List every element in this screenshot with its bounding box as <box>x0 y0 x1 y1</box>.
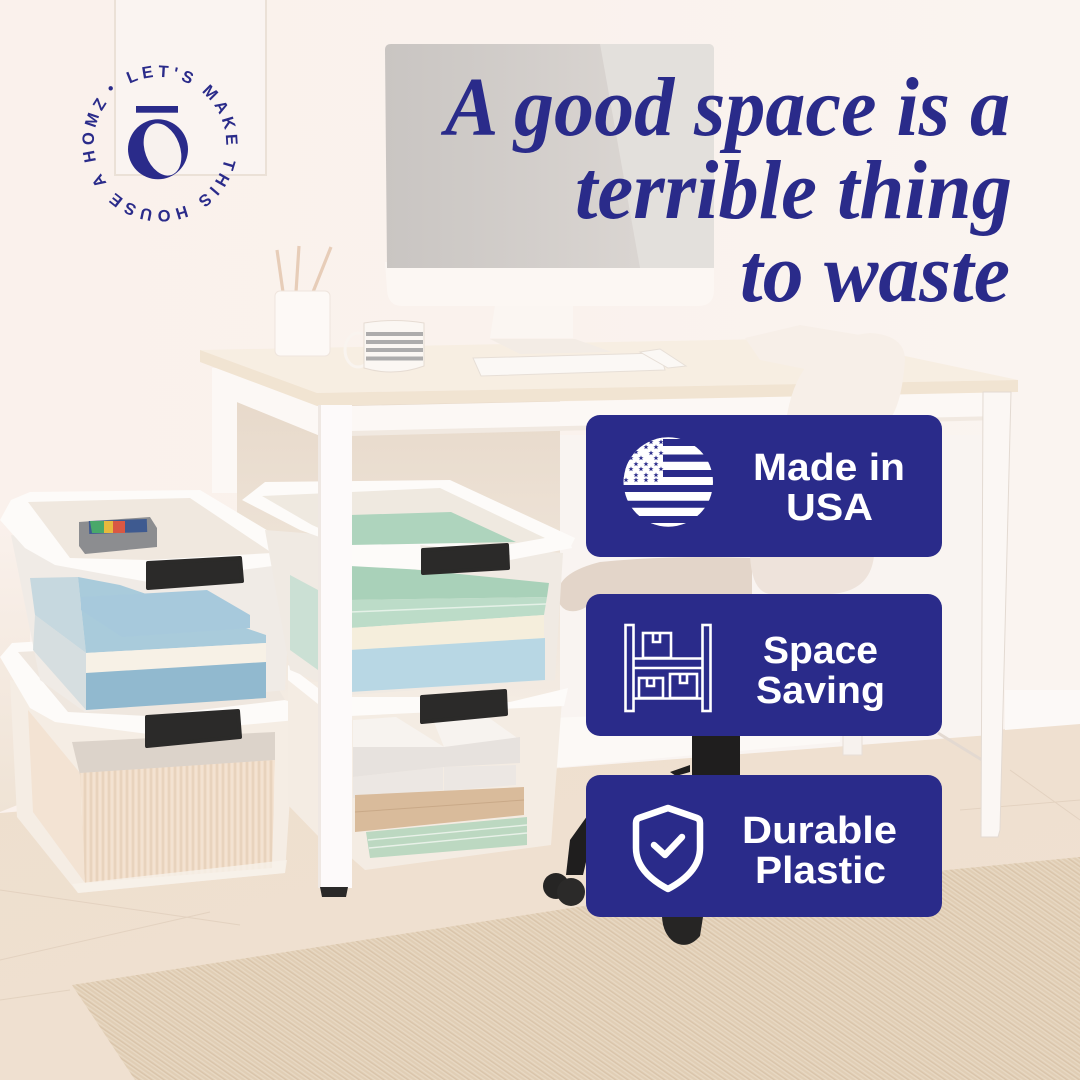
badge label <box>756 630 885 712</box>
keyboard and mouse <box>473 349 686 376</box>
badge label: Made in <box>753 447 905 489</box>
handle <box>423 545 508 573</box>
badge: Durable Plastic <box>586 775 942 917</box>
storage bin: upper left <box>0 490 305 712</box>
framed picture <box>115 0 266 175</box>
tray of crayons <box>79 517 157 554</box>
badge label: Plastic <box>755 850 886 892</box>
storage bin: lower left <box>0 640 303 893</box>
back left leg <box>212 368 237 493</box>
pencil cup <box>275 246 331 356</box>
wall <box>0 0 1080 830</box>
handle <box>422 691 506 722</box>
handle <box>148 558 242 588</box>
icon: shield with check <box>636 808 700 889</box>
title: A good space is a <box>440 61 1010 154</box>
seat <box>558 557 752 611</box>
icon: american flag <box>623 437 713 528</box>
striped mug <box>345 320 424 372</box>
title: to waste <box>740 227 1010 320</box>
desk top <box>200 338 1018 393</box>
brand logo: circular badge: LET'S MAKE THIS HOUSE A HOMZ <box>82 65 238 222</box>
storage bin: upper right <box>242 480 575 695</box>
badge: Space Saving <box>586 594 942 736</box>
badge label: Space <box>763 630 878 672</box>
front left desk leg <box>318 405 352 897</box>
badge label <box>742 810 897 892</box>
office chair <box>543 333 905 945</box>
handle <box>147 711 240 746</box>
blue boxes <box>30 577 86 653</box>
chair wheels <box>543 873 569 899</box>
green and blue stacks <box>350 563 549 600</box>
chair base <box>692 735 740 776</box>
desk <box>200 338 1018 837</box>
rug <box>72 857 1080 1080</box>
tray behind chair <box>745 325 860 372</box>
desk apron <box>222 368 1000 440</box>
floor <box>0 723 1080 1080</box>
badge label <box>753 447 905 529</box>
monitor <box>385 44 714 354</box>
backrest <box>787 333 905 416</box>
logo mark <box>128 106 188 181</box>
right front leg <box>981 392 1011 837</box>
wall area under the desk <box>237 395 560 800</box>
right rear leg and bar <box>843 700 862 755</box>
badge label: Saving <box>756 670 885 712</box>
title <box>440 61 1012 320</box>
storage bin: lower right <box>288 665 568 870</box>
title: terrible thing <box>575 144 1012 237</box>
badge label: USA <box>786 487 873 529</box>
hanging files <box>28 710 85 883</box>
icon: storage shelves <box>626 625 710 711</box>
stacked boxes <box>353 717 444 747</box>
badge label: Durable <box>742 810 897 852</box>
logo ring text <box>94 77 226 210</box>
badge: Made in USA <box>586 415 942 557</box>
